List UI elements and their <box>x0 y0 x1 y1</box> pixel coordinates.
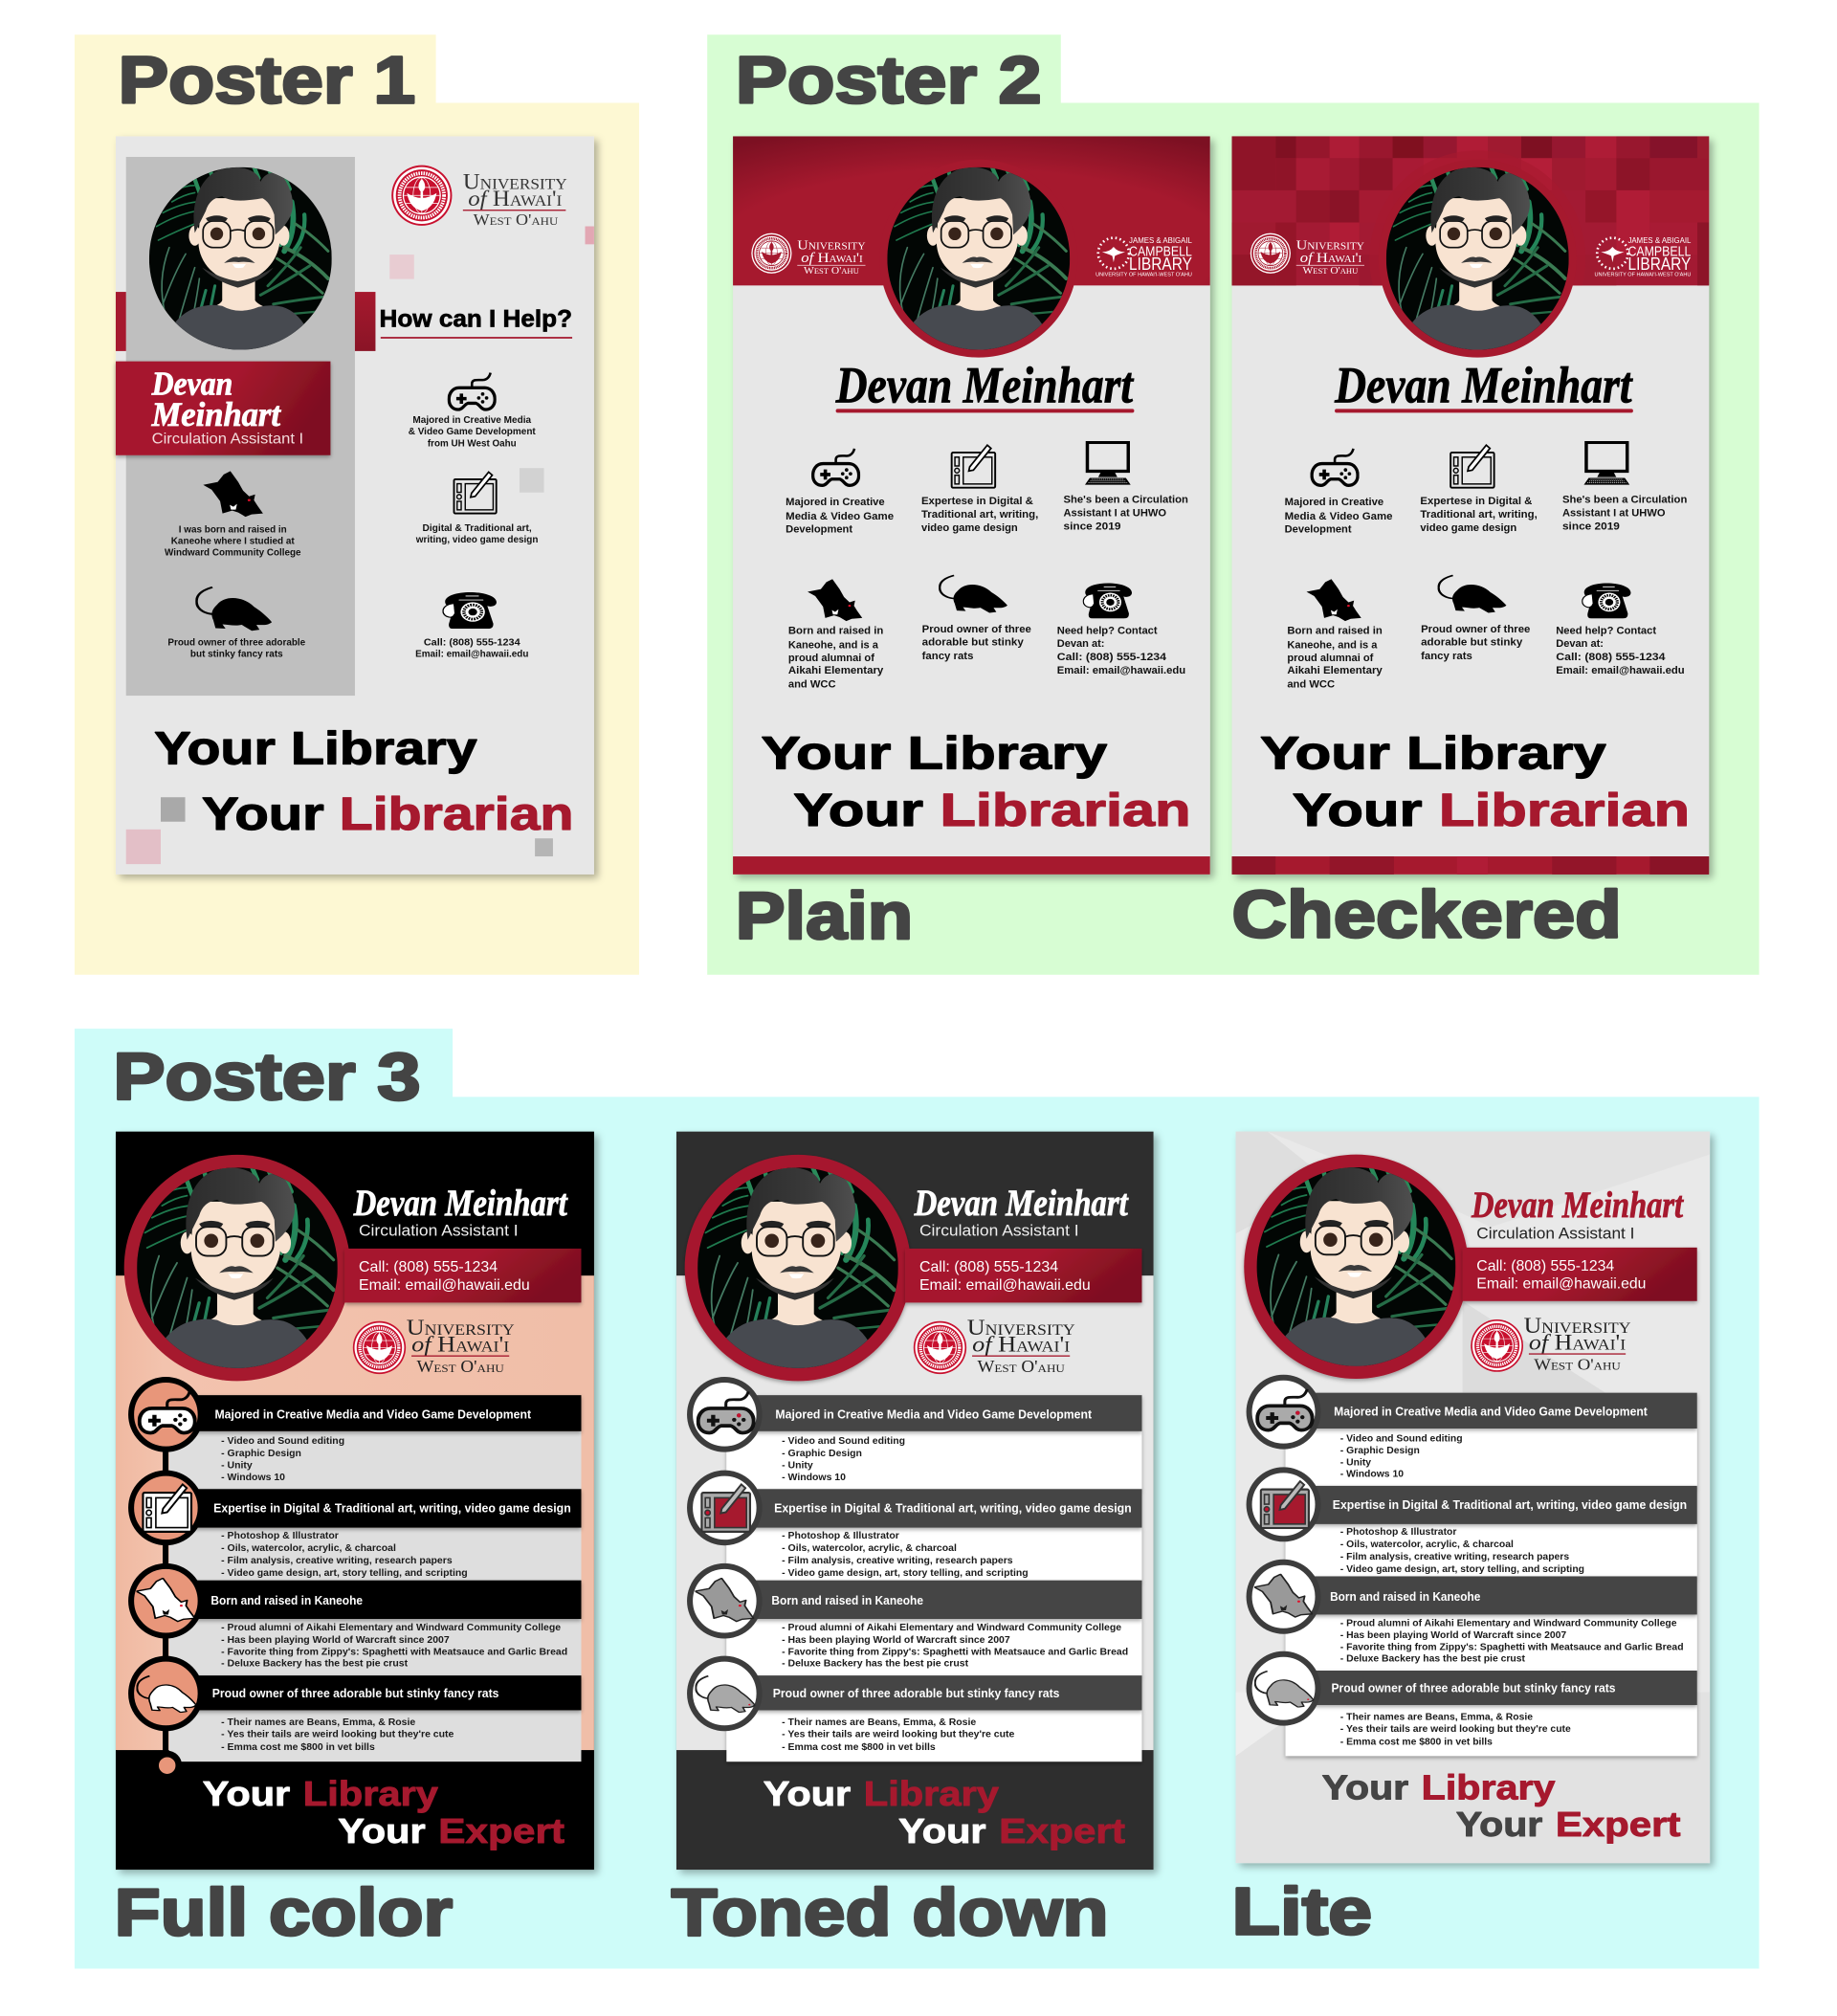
icon: computer <box>1583 442 1629 485</box>
name plate: Meinhart <box>151 395 281 433</box>
row 1: - Unity <box>1340 1458 1371 1469</box>
university logo <box>751 233 866 277</box>
university logo <box>914 1316 1075 1376</box>
row 3: - Favorite thing from Zippy's: Spaghetti with Meatsauce and Garlic Bread <box>221 1648 567 1658</box>
university logo: of Hawai'i <box>411 1332 509 1357</box>
portrait with ring <box>879 160 1077 359</box>
name: Devan Meinhart <box>1334 357 1633 414</box>
text: job: She's been a Circulation <box>1063 494 1188 505</box>
text: rats: but stinky fancy rats <box>190 650 283 660</box>
row 2: - Video game design, art, story telling, and scripting <box>221 1568 468 1579</box>
row 2 <box>726 1489 1141 1582</box>
text: contact <box>1556 626 1685 676</box>
poster 3: toned down <box>676 1132 1154 1870</box>
row 3 <box>726 1581 1141 1676</box>
slogan: Your <box>338 1811 426 1850</box>
slogan: Expert <box>999 1811 1125 1850</box>
icon: phone <box>443 592 497 629</box>
text: major <box>1285 497 1393 535</box>
row 3: - Favorite thing from Zippy's: Spaghetti with Meatsauce and Garlic Bread <box>782 1648 1128 1658</box>
poster 1 grey column <box>126 157 355 696</box>
peach middle band <box>116 1275 594 1750</box>
contact bar <box>344 1249 581 1302</box>
icon circle: gamepad <box>1250 1378 1317 1447</box>
row 1: Majored in Creative Media and Video Game Development <box>214 1407 532 1421</box>
text: rats: adorable but stinky <box>922 637 1025 649</box>
red accent right <box>355 292 375 351</box>
text: job: She's been a Circulation <box>1562 494 1688 505</box>
row 1 <box>167 1395 581 1491</box>
name plate: Circulation Assistant I <box>152 432 303 448</box>
label: Plain: Plain <box>736 878 913 953</box>
row 3: - Favorite thing from Zippy's: Spaghetti with Meatsauce and Garlic Bread <box>1340 1643 1684 1653</box>
library logo: UNIVERSITY OF HAWAI'I-WEST O'AHU <box>1595 272 1691 277</box>
text: major: Media & Video Game <box>786 511 894 522</box>
contact bar: Email: email@hawaii.edu <box>1476 1275 1646 1292</box>
text: expertise: Expertese in Digital & <box>921 496 1033 507</box>
timeline end dot <box>156 1754 179 1777</box>
text: born <box>165 524 301 559</box>
icon: tablet <box>952 445 995 488</box>
university logo: West O'ahu <box>416 1357 504 1376</box>
name and title <box>353 1183 568 1240</box>
row 4: - Their names are Beans, Emma, & Rosie <box>1340 1712 1533 1722</box>
contact bar: Email: email@hawaii.edu <box>359 1277 530 1294</box>
poster 3: full color <box>116 1132 594 1870</box>
university logo <box>353 1316 515 1376</box>
row 3: - Deluxe Backery has the best pie crust <box>782 1659 969 1670</box>
heading: How can I Help?: How can I Help? <box>379 305 572 332</box>
slogan <box>203 1774 564 1850</box>
text: born: proud alumnai of <box>1287 653 1374 664</box>
row 3: - Proud alumni of Aikahi Elementary and Windward Community College <box>782 1623 1121 1633</box>
panel: Poster 3 background <box>75 1029 1760 1969</box>
row 2: - Video game design, art, story telling, and scripting <box>782 1568 1029 1579</box>
row 2: - Photoshop & Illustrator <box>782 1531 899 1541</box>
row 1: - Unity <box>221 1461 253 1472</box>
text: born: and WCC <box>1287 678 1335 690</box>
label: Lite: Lite <box>1232 1873 1372 1948</box>
slogan: Your <box>1293 785 1423 836</box>
row 1: - Windows 10 <box>782 1473 846 1483</box>
university logo: University <box>1524 1314 1631 1339</box>
text: born <box>788 626 884 690</box>
slogan: Librarian <box>940 785 1191 836</box>
text: contact: Email: email@hawaii.edu <box>415 650 528 660</box>
row 3: - Proud alumni of Aikahi Elementary and Windward Community College <box>221 1623 561 1633</box>
text: born: and WCC <box>788 678 836 690</box>
slogan <box>762 728 1191 836</box>
row 1 <box>726 1395 1141 1491</box>
name and title: Devan Meinhart <box>1471 1185 1684 1226</box>
text: digital art: writing, video game design <box>415 535 539 545</box>
text: born: Aikahi Elementary <box>788 665 884 676</box>
name: Devan Meinhart <box>835 357 1135 414</box>
timeline connector <box>163 1414 168 1761</box>
text: job: Assistant I at UHWO <box>1562 508 1666 520</box>
contact bar: Call: (808) 555-1234 <box>1476 1258 1615 1274</box>
text: major <box>786 497 894 535</box>
text: expertise: video game design <box>921 522 1018 534</box>
icon circle: island <box>690 1566 760 1635</box>
row 2: - Oils, watercolor, acrylic, & charcoal <box>221 1543 396 1554</box>
checkered paper <box>1232 136 1709 875</box>
text: contact: Email: email@hawaii.edu <box>1057 665 1185 676</box>
row 2: - Film analysis, creative writing, research papers <box>1340 1552 1569 1562</box>
row 1: - Video and Sound editing <box>782 1436 905 1447</box>
university logo: of Hawai'i <box>972 1332 1070 1357</box>
icon: phone <box>1083 583 1132 618</box>
heading: Poster 1: Poster 1 <box>119 43 415 118</box>
slogan <box>1322 1768 1680 1844</box>
checkered header band <box>1232 136 1709 285</box>
name and title: Devan Meinhart <box>914 1183 1129 1224</box>
university logo: University <box>797 238 866 254</box>
icon circle: island <box>131 1566 201 1635</box>
row 3: - Has been playing World of Warcraft since 2007 <box>1340 1630 1566 1641</box>
text: expertise <box>1420 496 1538 534</box>
plain header band <box>733 136 1210 285</box>
text: rats: Proud owner of three adorable <box>167 638 306 649</box>
text: contact: Email: email@hawaii.edu <box>1556 665 1685 676</box>
portrait with ring <box>124 1155 350 1381</box>
row 4: - Their names are Beans, Emma, & Rosie <box>221 1717 415 1728</box>
label: Full color: Full color <box>115 1875 453 1950</box>
icon circle: tablet <box>131 1473 201 1542</box>
university logo: West O'ahu <box>977 1357 1065 1376</box>
icon circle: rat <box>690 1659 760 1728</box>
text: job <box>1063 494 1188 533</box>
text: contact: Devan at: <box>1057 638 1104 650</box>
text: born: proud alumnai of <box>788 653 874 664</box>
row 1: Majored in Creative Media and Video Game Development <box>775 1407 1093 1421</box>
plain footer band <box>733 856 1210 875</box>
row 1: - Graphic Design <box>782 1449 862 1459</box>
light middle band <box>676 1275 1154 1750</box>
text: major: from UH West Oahu <box>428 438 517 449</box>
text: rats: Proud owner of three <box>1421 624 1530 635</box>
text: born: Kaneohe where I studied at <box>171 536 296 546</box>
poster 1 <box>116 136 594 875</box>
text: rats <box>922 624 1031 662</box>
paper <box>676 1132 1154 1870</box>
row 4 <box>1286 1671 1697 1756</box>
text: job <box>1562 494 1688 533</box>
text: job: since 2019 <box>1562 521 1620 533</box>
red accent left <box>116 292 126 351</box>
library logo: CAMPBELL <box>1129 244 1192 259</box>
text: born: Kaneohe, and is a <box>788 639 879 651</box>
heading: Poster 3: Poster 3 <box>113 1039 420 1114</box>
contact bar <box>1463 1248 1697 1301</box>
row 2: - Oils, watercolor, acrylic, & charcoal <box>1340 1540 1514 1550</box>
slogan: Library <box>303 1774 438 1813</box>
portrait <box>149 166 332 359</box>
icon: phone <box>1582 583 1630 618</box>
row 2: Expertise in Digital & Traditional art, writing, video game design <box>213 1501 571 1515</box>
text: contact: Need help? Contact <box>1556 626 1656 637</box>
slogan: Librarian <box>340 788 573 840</box>
university logo <box>1250 233 1364 277</box>
text: contact: Call: (808) 555-1234 <box>424 638 520 649</box>
university logo: West O'ahu <box>1534 1356 1621 1374</box>
university logo <box>391 166 567 229</box>
slogan <box>1260 728 1690 836</box>
row 2: - Film analysis, creative writing, research papers <box>782 1556 1013 1566</box>
name and title: Devan Meinhart <box>353 1183 568 1224</box>
text: contact: Call: (808) 555-1234 <box>1556 652 1666 663</box>
university logo: University <box>407 1316 515 1340</box>
slogan: Library <box>1422 1768 1555 1807</box>
text: born <box>1287 626 1383 690</box>
contact bar: Email: email@hawaii.edu <box>919 1277 1091 1294</box>
icon circle: tablet <box>690 1473 760 1542</box>
row 1: - Unity <box>782 1461 813 1472</box>
label: Checkered: Checkered <box>1232 877 1622 952</box>
row 1 <box>1286 1393 1697 1487</box>
text: rats <box>1421 624 1530 662</box>
row 3: - Has been playing World of Warcraft since 2007 <box>221 1635 450 1646</box>
text: digital art <box>415 523 539 545</box>
slogan <box>764 1774 1125 1850</box>
row 2: Expertise in Digital & Traditional art, writing, video game design <box>1333 1498 1687 1512</box>
portrait with ring <box>1244 1155 1469 1379</box>
text: rats: fancy rats <box>1421 651 1472 662</box>
slogan <box>154 722 573 840</box>
icon: gamepad <box>449 373 495 410</box>
text: job: since 2019 <box>1063 521 1120 533</box>
row 2 <box>167 1489 581 1582</box>
university logo: West O'ahu <box>474 210 559 229</box>
library logo <box>1595 236 1692 277</box>
slogan: Your Library <box>154 722 477 774</box>
text: major: Majored in Creative <box>786 497 885 508</box>
slogan: Your <box>898 1811 986 1850</box>
library logo: UNIVERSITY OF HAWAI'I-WEST O'AHU <box>1096 272 1192 277</box>
library logo: JAMES & ABIGAIL <box>1129 236 1192 245</box>
row 1: - Graphic Design <box>221 1449 301 1459</box>
icon circle: island <box>1250 1562 1317 1631</box>
university logo <box>1471 1314 1631 1374</box>
text: expertise: Expertese in Digital & <box>1420 496 1532 507</box>
text: major: Development <box>786 523 852 535</box>
library logo: LIBRARY <box>1129 255 1192 274</box>
text: born: I was born and raised in <box>179 524 287 535</box>
row 1: - Windows 10 <box>1340 1470 1404 1480</box>
slogan: Your <box>764 1774 851 1813</box>
name and title: Circulation Assistant I <box>1476 1225 1634 1243</box>
checkered footer band <box>1232 856 1709 875</box>
row 2: - Oils, watercolor, acrylic, & charcoal <box>782 1543 957 1554</box>
row 3 <box>167 1581 581 1676</box>
panel: Poster 1 background <box>75 34 639 975</box>
row 3 <box>1286 1576 1697 1672</box>
text: born: Kaneohe, and is a <box>1287 639 1378 651</box>
row 2 <box>1286 1486 1697 1578</box>
slogan: Library <box>864 1774 999 1813</box>
university logo: West O'ahu <box>1302 265 1358 277</box>
heading: Poster 2: Poster 2 <box>736 43 1042 118</box>
slogan: Your <box>202 788 324 840</box>
text: born: Windward Community College <box>165 548 301 559</box>
text: contact <box>415 638 528 660</box>
icon circle: rat <box>131 1659 201 1728</box>
icon circle: gamepad <box>131 1380 201 1450</box>
slogan: Your <box>1456 1805 1542 1844</box>
text: expertise <box>921 496 1038 534</box>
library logo: LIBRARY <box>1628 255 1691 274</box>
row 3: Born and raised in Kaneohe <box>771 1594 923 1607</box>
label: Toned down: Toned down <box>672 1875 1109 1950</box>
decorative squares <box>126 227 594 864</box>
name and title <box>1471 1185 1684 1243</box>
contact bar: Call: (808) 555-1234 <box>919 1259 1059 1275</box>
university logo: West O'ahu <box>804 265 859 277</box>
portrait with ring <box>685 1155 911 1381</box>
text: born: Aikahi Elementary <box>1287 665 1383 676</box>
text: job: Assistant I at UHWO <box>1063 508 1166 520</box>
slogan: Your Library <box>1260 728 1606 780</box>
text: expertise: video game design <box>1420 522 1517 534</box>
row 2: Expertise in Digital & Traditional art, writing, video game design <box>774 1501 1132 1515</box>
icon: rat <box>196 587 272 631</box>
plain paper <box>733 136 1210 875</box>
icon: rat <box>1439 575 1506 613</box>
slogan: Expert <box>1556 1805 1680 1844</box>
icon: island <box>203 471 263 517</box>
icon circle: rat <box>1250 1654 1317 1723</box>
library logo <box>1096 236 1192 277</box>
text: major: & Video Game Development <box>409 427 537 437</box>
row 1: - Video and Sound editing <box>1340 1433 1463 1444</box>
row 3: - Deluxe Backery has the best pie crust <box>1340 1654 1526 1665</box>
text: born: Born and raised in <box>1287 626 1383 637</box>
row 1: - Graphic Design <box>1340 1446 1420 1456</box>
icon: tablet <box>1450 445 1494 488</box>
icon: computer <box>1085 442 1131 485</box>
row 4: Proud owner of three adorable but stinky fancy rats <box>773 1687 1059 1700</box>
row 3: Born and raised in Kaneohe <box>1330 1590 1480 1604</box>
row 2: - Film analysis, creative writing, research papers <box>221 1556 453 1566</box>
contact bar: Call: (808) 555-1234 <box>359 1259 498 1275</box>
university logo: of Hawai'i <box>801 251 863 266</box>
poster 2: checkered <box>1232 136 1709 875</box>
row 1: - Video and Sound editing <box>221 1436 344 1447</box>
row 4: Proud owner of three adorable but stinky fancy rats <box>212 1687 498 1700</box>
row 1: Majored in Creative Media and Video Game Development <box>1334 1406 1649 1419</box>
paper <box>1236 1132 1710 1863</box>
text: contact: Call: (808) 555-1234 <box>1057 652 1167 663</box>
slogan: Your <box>203 1774 290 1813</box>
university logo: University <box>463 170 567 194</box>
name and title <box>914 1183 1129 1240</box>
row 4: - Yes their tails are weird looking but they're cute <box>221 1730 454 1740</box>
poster 2: plain <box>733 136 1210 875</box>
portrait with ring <box>1379 153 1582 358</box>
subtle background facets <box>1236 1132 1710 1863</box>
icon circle: gamepad <box>690 1380 760 1450</box>
text: expertise: Traditional art, writing, <box>921 509 1038 521</box>
slogan: Your <box>1322 1768 1408 1807</box>
row 3: - Has been playing World of Warcraft since 2007 <box>782 1635 1010 1646</box>
university logo: of Hawai'i <box>468 187 562 210</box>
icon: island <box>808 579 862 621</box>
text: major: Majored in Creative <box>1285 497 1383 508</box>
poster 3: lite <box>1236 1132 1710 1863</box>
row 4: - Emma cost me $800 in vet bills <box>221 1742 375 1753</box>
text: expertise: Traditional art, writing, <box>1420 509 1538 521</box>
icon: island <box>1307 579 1361 621</box>
name plate <box>116 362 330 455</box>
university logo: University <box>967 1316 1075 1340</box>
row 1: - Windows 10 <box>221 1473 285 1483</box>
text: born: Born and raised in <box>788 626 884 637</box>
text: major: Development <box>1285 523 1352 535</box>
text: major: Majored in Creative Media <box>412 415 532 426</box>
library logo: JAMES & ABIGAIL <box>1628 236 1692 245</box>
row 4: - Their names are Beans, Emma, & Rosie <box>782 1717 976 1728</box>
poster 1 paper <box>116 136 594 875</box>
text: contact: Devan at: <box>1556 638 1604 650</box>
row 4: Proud owner of three adorable but stinky fancy rats <box>1331 1682 1616 1695</box>
panel: Poster 2 background <box>707 34 1760 975</box>
slogan: Your Library <box>762 728 1107 780</box>
text: rats <box>167 638 306 660</box>
icon: tablet <box>454 472 497 514</box>
university logo: University <box>1296 238 1364 254</box>
text: major <box>409 415 537 449</box>
name and title: Circulation Assistant I <box>919 1222 1079 1240</box>
icon circle: tablet <box>1250 1470 1317 1539</box>
name plate: Devan <box>151 366 232 403</box>
row 4 <box>167 1675 581 1761</box>
icon: rat <box>940 575 1007 613</box>
row 3: - Deluxe Backery has the best pie crust <box>221 1659 409 1670</box>
row 4: - Emma cost me $800 in vet bills <box>1340 1737 1493 1747</box>
row 2: - Photoshop & Illustrator <box>1340 1527 1456 1538</box>
text: major: Media & Video Game <box>1285 511 1393 522</box>
text: digital art: Digital & Traditional art, <box>423 523 532 534</box>
paper <box>116 1132 594 1870</box>
row 4: - Emma cost me $800 in vet bills <box>782 1742 936 1753</box>
row 3: Born and raised in Kaneohe <box>210 1594 363 1607</box>
text: contact: Need help? Contact <box>1057 626 1158 637</box>
text: contact <box>1057 626 1185 676</box>
text: rats: Proud owner of three <box>922 624 1031 635</box>
row 4 <box>726 1675 1141 1761</box>
text: rats: fancy rats <box>922 651 973 662</box>
icon: gamepad <box>1312 449 1358 485</box>
row 3: - Proud alumni of Aikahi Elementary and Windward Community College <box>1340 1618 1677 1628</box>
slogan: Your <box>793 785 923 836</box>
row 2: - Photoshop & Illustrator <box>221 1531 339 1541</box>
row 2: - Video game design, art, story telling, and scripting <box>1340 1564 1584 1575</box>
university logo: of Hawai'i <box>1529 1330 1626 1355</box>
slogan: Librarian <box>1439 785 1690 836</box>
row 4: - Yes their tails are weird looking but they're cute <box>1340 1724 1571 1735</box>
name and title: Circulation Assistant I <box>359 1222 519 1240</box>
slogan: Expert <box>438 1811 564 1850</box>
row 4: - Yes their tails are weird looking but they're cute <box>782 1730 1014 1740</box>
icon: gamepad <box>813 449 859 485</box>
library logo: CAMPBELL <box>1628 244 1691 259</box>
university logo: of Hawai'i <box>1300 251 1361 266</box>
contact bar <box>905 1249 1141 1302</box>
text: rats: adorable but stinky <box>1421 637 1523 649</box>
